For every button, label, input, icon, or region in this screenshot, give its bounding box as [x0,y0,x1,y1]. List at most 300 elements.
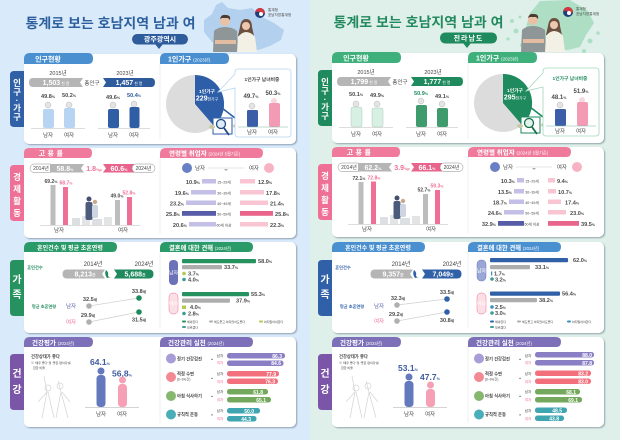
bars 2023: 49.6% [106,95,121,101]
chart: health management practice: • [211,394,213,399]
chart: health management practice: 88.0 [582,353,592,359]
region label pill [132,34,188,49]
chart: number of marriages: 7,049건 [432,272,454,278]
chart: health management practice: 65.1 [256,398,266,404]
background: Jeonnam half [310,0,620,440]
chart: average age at first marriage: 남자 [66,302,76,310]
card [24,148,296,238]
chart: total population 2015 and 2023: 1,799 천 명 [351,79,378,86]
icon: house and magnifier [517,107,547,134]
title: 통계로 보는 호남지역 남과 여 [334,15,504,30]
card [24,337,296,427]
section: health, Gwangju [10,337,296,427]
chart: number of marriages: 2024년 [443,260,461,268]
chart: health management practice [166,353,285,423]
pie chart: one-person households: 295천가구 [504,94,527,102]
chart: average age at first marriage: 평균 초혼연령 [340,303,364,309]
card [332,147,604,237]
bars [358,182,364,224]
divider [159,64,161,140]
legend: 해도좋고 하지않아도좋다 [522,319,553,324]
chart: views on marriage: 3.2% [495,278,507,284]
divider [159,158,161,234]
note: good health status [31,353,71,370]
chart: average age at first marriage: 33.5세 [440,290,454,296]
chart: average age at first marriage: 여자 [66,318,76,326]
chart: health management practice: 남자 [525,389,532,394]
chart: employment rate change: 72.8% [368,176,381,182]
side label [318,70,332,126]
chart: health rating: 53.1% [398,363,419,373]
title: 통계로 보는 호남지역 남과 여 [26,16,196,31]
region label pill: 광주광역시 [144,34,176,44]
chart: total population 2015 and 2023: 49.1% [435,94,450,100]
chart: views on marriage: 62.0% [573,258,588,264]
side label: 강 [12,384,22,396]
side label: · [324,94,326,104]
chart: total population 2015 and 2023: 총인구 [84,79,100,87]
chart: total population 2015 and 2023: 여자 [64,131,74,139]
legend: men and women: 남자 [503,163,513,171]
chart: health management practice: 48.5 [552,408,562,414]
chart: health management practice: 남자 [217,353,224,358]
chart: health management practice: 남자 [525,371,532,376]
chart: employment rate change: 72.1% [353,176,366,182]
chart: health management practice: 남자 [217,389,224,394]
divider [159,347,161,423]
chart: health management practice: 정기 건강검진 [177,356,202,362]
chart: total population 2015 and 2023: 2023년 [424,68,442,76]
chart: total population 2015 and 2023: 총인구 [392,78,408,86]
chart: health management practice: 적정 수면 [485,370,502,378]
side label: 경 [321,171,329,181]
chart: employment rate change: 2024년 [444,164,460,171]
chart: employed by age: 10.9% [186,180,201,186]
chart: health management practice: 43.8 [549,416,559,422]
illustration: woman [237,19,257,52]
card [332,242,604,333]
map of Jeonnam [506,0,600,53]
legend: men and women: 여자 [557,163,567,171]
region label pill [440,32,497,48]
chart: employment rate change [30,164,155,234]
chart: employment rate change: 60.6% [110,166,128,173]
section: family, Gwangju [10,242,296,333]
chart: number of marriages: 8,213건 [74,272,96,278]
chart: number of marriages: 혼인건수 [27,264,43,271]
chart: employed by age: 19.6% [175,191,190,197]
chart: total population 2015 and 2023: 남자 [351,130,361,138]
chart: health rating: 56.8% [112,368,133,378]
tab: health assessment [332,337,401,347]
chart: health rating: 47.7% [420,372,441,382]
tab: views on marriage [468,242,561,252]
side label: 인 [13,78,21,88]
chart: health management practice: 여자 [525,416,532,421]
chart: employed by age: 24.6% [488,211,503,217]
callout: gender share of one-person households: 1인가구 남녀비중 [245,76,280,83]
chart: views on marriage: 4.0% [188,278,200,284]
bars 2015: 49.8% [41,94,56,100]
bars [50,185,56,225]
chart: employed by age: 32.9% [482,222,497,228]
side label [10,71,24,127]
chart: employment rate change: 남자 [362,225,372,233]
chart: views on marriage: 여자 [477,300,486,308]
chart: health management practice: 적정 수면 [177,370,194,378]
chart: health management practice: 여자 [217,360,224,365]
tab: employment rate: 고용률 [39,150,65,158]
chart: employed by age [482,178,596,228]
chart: views on marriage: 55.3% [251,292,266,298]
header: Jeonnam [334,0,600,53]
tab: employment rate: 고용률 [347,148,373,156]
chart: employed by age: 40~49세 [217,201,231,206]
chart: number of marriages: 2014년 [84,260,102,268]
legend: men and women: 여자 [249,164,259,172]
callout: gender share of one-person households [526,68,599,136]
chart: employed by age: 12.9% [258,180,273,186]
callout: gender share of one-person households: 남자 [555,127,565,135]
chart: average age at first marriage: 32.3세 [391,296,405,302]
side label: 구 [13,112,21,122]
chart: health rating: 여자 [117,410,127,418]
side label: 인 [321,77,329,87]
legend: 모르겠다 [495,324,506,330]
chart: employment rate change: 2024년 [136,165,152,172]
chart: employed by age: 20.6% [173,223,188,229]
illustration: man [213,15,238,52]
legend: men and women: 남자 [195,164,205,172]
chart: employed by age: 22.3% [270,223,285,229]
chart: health management practice: 아침 식사하기 [177,392,202,400]
divider [467,63,469,139]
chart: health management practice: 남자 [217,371,224,376]
chart: employed by age: 10.3% [501,179,516,185]
chart: views on marriage: 38.2% [539,298,554,304]
note: good health status: 건강상태가 좋다 [31,353,60,360]
chart: health management practice: 여자 [525,397,532,402]
chart: average age at first marriage: 33.8세 [132,289,146,295]
tab: employed by age: 연령별 취업자 (2024년 5월기준) [477,148,549,156]
chart: employed by age: 23.2% [170,201,185,207]
chart: employment rate change: 2014년 [341,164,357,171]
tab: marriages and first marriage age [24,242,117,252]
callout: gender share of one-person households: 48.1% [552,95,567,101]
chart: health rating: 64.1% [90,357,111,367]
chart: health management practice: 86.3 [272,354,282,360]
chart: average age at first marriage: 30.8세 [440,318,454,324]
chart: employed by age: 23.0% [570,211,585,217]
chart: employment rate change [338,163,463,233]
logo: Honam statistics office [255,7,291,18]
chart: employed by age: 17.4% [565,200,580,206]
side label: 활 [321,195,329,205]
chart: employment rate change: 68.7% [60,180,73,186]
card [24,54,296,144]
side label: 가 [321,102,329,112]
tab: health assessment: 건강평가 (2024년) [340,338,383,347]
tab: one-person households [160,53,229,64]
chart: employed by age: 9.4% [557,179,569,185]
chart: employed by age: 25.8% [166,212,181,218]
chart: total population 2015 and 2023: 남자 [108,131,118,139]
chart: views on marriage: 33.7% [224,265,239,271]
chart: employed by age: 10.7% [558,190,573,196]
side label [10,260,24,316]
section: population and households, Gwangju [10,53,296,144]
legend: men and women [182,163,274,173]
chart: employed by age: 18.7% [493,200,508,206]
chart: number of marriages: 5,688건 [124,272,146,278]
chart: employment rate change: 여자 [118,226,128,234]
tab: health management practice [160,337,253,347]
chart: total population 2015 and 2023: 2023년 [116,69,134,77]
chart: total population 2015 and 2023: 1,457 천 명 [116,80,143,87]
chart: health rating: 남자 [404,410,414,418]
side label: · [16,95,18,105]
chart: number of marriages: 9,357건 [382,272,404,278]
chart: average age at first marriage: 31.5세 [132,318,146,324]
chart: employed by age: 30~39세 [525,190,539,194]
chart: views on marriage: 2.5% [495,305,507,311]
icon: house and magnifier [209,108,239,135]
chart: health management practice [474,352,594,422]
chart: health management practice: (6~9시간) [485,376,498,382]
chart: health management practice: 50.0 [244,409,254,415]
chart: employment rate change: 62.2% [364,165,382,172]
chart: number of marriages: 2014년 [392,260,410,268]
legend: men and women [490,162,582,172]
tab: views on marriage: 결혼에 대한 견해 (2024년) [169,243,232,252]
tab: marriages and first marriage age: 혼인건수 및 평균 초혼연령 [345,244,411,252]
chart: health management practice: 여자 [525,360,532,365]
side label: 제 [13,184,21,194]
card [332,337,604,427]
chart: views on marriage [169,259,284,330]
chart: average age at first marriage [32,289,146,326]
tab: employment rate [332,147,400,157]
note: good health status: 합한 비율 [341,365,353,370]
region label pill: 전라남도 [454,34,483,42]
chart: health management practice: 83.0 [578,379,588,385]
logo: Honam statistics office: 통계청 [268,7,278,12]
chart: views on marriage: 2.8% [188,312,200,318]
logo: Honam statistics office: 호남지방통계청 [576,11,599,16]
chart: number of marriages: 혼인건수 [335,264,351,271]
chart: health management practice: 83.2 [578,371,588,377]
section: health, Jeonnam [318,337,604,427]
tab: employed by age [468,147,571,157]
tab: health management practice [468,337,561,347]
chart: health management practice: 87.8 [582,361,592,367]
note: good health status: 합한 비율 [33,365,45,370]
chart: average age at first marriage: 여자 [374,317,384,325]
chart: views on marriage: 남자 [169,270,178,276]
chart: employed by age: 21.4% [270,201,285,207]
chart: employed by age: 30~39세 [217,190,231,196]
chart: employment rate change: 59.3% [431,184,444,190]
chart: total population 2015 and 2023: 남자 [43,131,53,139]
legend [490,319,592,330]
chart: employment rate change: 69.2% [45,179,58,185]
chart: employed by age: 40~49세 [525,200,539,205]
chart: health rating [393,363,447,418]
chart: health management practice: • [211,412,213,418]
callout: gender share of one-person households: 남자 [247,128,257,136]
chart: employment rate change: 66.1% [418,165,436,172]
chart: health management practice: • [519,357,521,362]
chart: employed by age: 60세 이상 [217,222,232,228]
chart: health management practice: 84.6 [271,361,281,367]
chart: health management practice: 규칙적 운동 [485,411,506,418]
tab: health management practice: 건강관리 실천 (2024년) [476,338,532,347]
chart: average age at first marriage: 평균 초혼연령 [32,303,56,309]
chart: employed by age: 17.8% [266,191,281,197]
chart: average age at first marriage: 남자 [374,302,384,310]
chart: health management practice: 여자 [525,379,532,384]
chart: health management practice: 아침 식사하기 [485,392,510,400]
pie chart: one-person households: 1인가구 [507,87,524,94]
chart: health management practice: 여자 [217,416,224,421]
note: good health status: ※ '매우 좋다' 및 '좋은 편이다'를 [339,360,379,365]
chart: health management practice: • [519,412,521,418]
bars 2015: 50.1% [349,92,364,98]
tab: marriages and first marriage age [332,242,425,252]
chart: employment rate change: 여자 [426,225,436,233]
callout: gender share of one-person households: 1인가구 남녀비중 [553,75,588,82]
chart: employed by age: 25.8% [275,212,290,218]
chart: employment rate change: 2014년 [33,165,49,172]
illustration: workers over city [72,196,112,225]
chart: health management practice: 남자 [525,353,532,358]
chart: health management practice: 69.1 [568,398,578,404]
tab: population status [24,53,93,64]
chart: number of marriages [27,260,154,278]
section: population and households, Jeonnam [318,52,604,143]
tab: health management practice: 건강관리 실천 (2024년) [168,338,224,347]
chart: employed by age: 50~59세 [217,212,231,216]
legend [182,319,284,330]
chart: average age at first marriage: 29.9세 [81,313,95,319]
tab: marriages and first marriage age: 혼인건수 및 평균 초혼연령 [37,244,103,252]
chart: health management practice: 정기 건강검진 [485,356,510,362]
section: economic activity, Jeonnam [318,147,604,237]
section: economic activity, Gwangju [10,148,296,238]
chart: health management practice: 남자 [525,408,532,413]
chart: views on marriage: 58.0% [258,259,273,265]
chart: total population 2015 and 2023: 1,503 천 명 [43,80,70,87]
legend: 해야한다 [495,319,506,324]
callout: gender share of one-person households: 51.9% [574,89,589,95]
chart: number of marriages [335,260,462,278]
chart: average age at first marriage [340,290,454,325]
header: Gwangju [26,2,291,52]
chart: total population 2015 and 2023 [29,69,155,139]
tab: population status [332,52,401,63]
side label: 활 [13,196,21,206]
chart: health management practice: 여자 [217,379,224,384]
note: good health status [339,353,379,370]
chart: employment rate change: 남자 [54,226,64,234]
side label: 동 [321,207,329,217]
divider [467,157,469,233]
callout: gender share of one-person households [218,69,291,137]
tab: one-person households: 1인가구 (2023년) [476,54,519,62]
chart: employment rate change: 3.9%p [394,165,410,172]
chart: health management practice: 여자 [217,397,224,402]
chart: employed by age: 50~59세 [525,210,539,216]
chart: total population 2015 and 2023: 2015년 [49,69,67,77]
chart: health management practice: • [211,376,213,381]
chart: views on marriage: 37.9% [236,298,251,304]
tab: employed by age: 연령별 취업자 (2024년 5월기준) [169,148,241,158]
divider [467,252,469,328]
illustration: workers over city [380,196,420,224]
side label: 족 [12,289,22,301]
chart: total population 2015 and 2023: 남자 [416,130,426,138]
chart: employed by age [166,179,290,229]
tab: one-person households: 1인가구 (2023년) [168,54,211,64]
side label: 경 [13,172,21,182]
note: good health status: ※ '매우 좋다' 및 '좋은 편이다'를 [31,360,71,365]
chart: total population 2015 and 2023: 49.9% [370,93,385,99]
chart: total population 2015 and 2023: 50.2% [62,93,77,99]
chart: health management practice: 77.9 [266,372,276,378]
chart: health management practice: 44.3 [241,417,251,423]
pie chart: one-person households [474,74,532,132]
illustration: exercising figures [38,376,70,418]
callout: gender share of one-person households: 49.7% [244,94,259,100]
tab: employment rate [24,148,92,158]
chart: health management practice: 68.1 [566,390,576,396]
tab: health assessment [24,337,93,347]
chart: views on marriage: 3.0% [495,311,507,317]
tab: views on marriage: 결혼에 대한 견해 (2024년) [477,243,540,252]
chart: employment rate change: 58.8% [56,166,74,173]
chart: average age at first marriage: 32.5세 [83,297,97,303]
side label: 가 [320,273,330,286]
illustration: woman [545,18,565,52]
tab: one-person households [468,52,537,63]
side label [10,354,24,410]
side label: 강 [320,384,330,396]
chart: average age at first marriage: 29.2세 [389,312,403,318]
tab: population status: 인구현황 [35,54,61,64]
chart: health management practice: • [519,376,521,381]
chart: health management practice: (6~9시간) [177,376,190,382]
logo: Honam statistics office [563,6,599,17]
tab: employed by age [160,148,263,158]
chart: health rating: 여자 [425,410,435,418]
chart: employment rate change: 1.8%p [86,166,102,173]
side label: 구 [321,86,329,96]
legend: 하지말아야한다 [264,319,284,324]
chart: health management practice: • [211,357,213,362]
chart: views on marriage: 1.7% [494,272,506,278]
chart: total population 2015 and 2023: 2015년 [357,68,375,76]
chart: views on marriage: 3.7% [188,272,200,278]
chart: views on marriage: 33.1% [535,265,550,271]
side label: 건 [12,368,22,380]
chart: employment rate change: 52.8% [123,190,136,196]
chart: employed by age: 60세 이상 [525,222,540,226]
legend: 해야한다 [187,319,198,324]
chart: employed by age: 15~29세 [217,180,231,184]
callout: gender share of one-person households: 50.3% [266,91,281,97]
background: Gwangju half [0,0,310,440]
map of Gwangju [204,2,284,50]
